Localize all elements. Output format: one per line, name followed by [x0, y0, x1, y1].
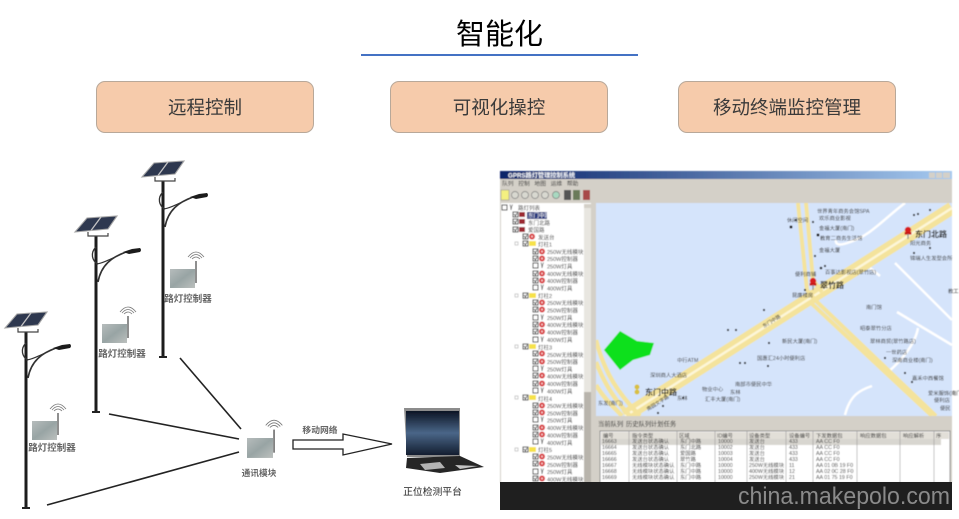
data table: 发送台	[749, 449, 765, 457]
controller icon 3	[170, 252, 204, 288]
tabs: 当前队列	[598, 419, 623, 428]
data table: 16663	[602, 439, 617, 445]
data table: AA CC F0	[816, 445, 840, 451]
map place labels: 百事达影视店(翠竹店)	[825, 268, 876, 276]
button: mobile monitoring management: 移动终端监控管理	[713, 97, 861, 118]
street lamp 2	[75, 216, 141, 413]
map place labels: 欢乐商业影视	[819, 214, 851, 222]
button: visual operation	[390, 81, 608, 133]
controller icon 2	[102, 307, 136, 343]
toolbar	[501, 190, 590, 200]
data table: 10000	[718, 439, 733, 445]
title	[361, 12, 638, 56]
map place labels: 昆廉楼房	[792, 291, 813, 299]
map place labels: 昭泰翠竹分店	[860, 324, 892, 332]
data table: 编号	[603, 432, 614, 440]
menu bar: 队列 控制 地图 运维 帮助	[502, 180, 579, 188]
device tree: 250W灯具	[547, 262, 573, 270]
map place labels: 深南商业楼(南门)	[892, 356, 933, 364]
data table: 10000	[718, 469, 733, 475]
map place labels: 新民大厦(南门)	[782, 337, 818, 345]
map place labels: 国惠汇24小时便利店	[757, 354, 805, 362]
map place labels	[598, 207, 959, 413]
device tree: 250W无线模块	[547, 402, 584, 410]
device tree: 250W控制器	[547, 306, 578, 314]
title bar	[500, 171, 952, 180]
device tree: 400W灯具	[547, 439, 573, 447]
arrow: to monitoring platform	[293, 434, 392, 455]
watermark band	[500, 482, 952, 510]
data table: 下发数据包	[816, 432, 843, 440]
device tree: 250W控制器	[547, 255, 578, 263]
map place labels: 东门中路	[761, 313, 782, 330]
data table: 250W无线模块	[749, 461, 785, 469]
button: visual operation: 可视化操控	[453, 97, 545, 118]
map place labels: 东林	[677, 394, 688, 402]
device tree: 东门中路	[528, 212, 551, 220]
data table: 16665	[602, 451, 617, 457]
map place labels: 便民	[940, 404, 951, 412]
data table: 16664	[602, 445, 617, 451]
data table: 序	[936, 432, 942, 440]
map	[596, 203, 952, 416]
data table: 无线模块状态确认	[632, 461, 675, 469]
device tree: 400W灯具	[547, 388, 573, 396]
communication module label: 通讯模块	[242, 467, 277, 478]
data table: AA CC F0	[816, 439, 840, 445]
communication module icon	[247, 420, 282, 458]
device tree: 路灯列表	[518, 204, 541, 212]
data table: 250W无线模块	[749, 473, 785, 481]
data table: 爱国路	[680, 449, 697, 457]
device tree: 400W无线模块	[547, 424, 584, 432]
tree scrollbar	[584, 204, 591, 483]
data table: 16668	[602, 469, 617, 475]
data table: 12	[789, 469, 795, 475]
data table: 10000	[718, 463, 733, 469]
data table: 区域	[679, 432, 690, 440]
map pins and road names: 东门中路	[645, 387, 677, 397]
data table: AA 01 75 19 F0	[816, 475, 853, 481]
data table: 响应数据包	[860, 432, 887, 440]
data table: 433	[789, 451, 798, 457]
data table: 发送台状态确认	[632, 455, 670, 463]
data table: AA 02 0C 28 F0	[816, 469, 853, 475]
icon: laptop	[404, 408, 484, 473]
controller label 2: 路灯控制器	[98, 348, 146, 360]
map place labels: 世界青年商务会馆SPA	[817, 207, 870, 215]
device tree: 250W无线模块	[547, 351, 584, 359]
device tree: 灯柱5	[538, 446, 552, 454]
controller label 1: 路灯控制器	[28, 442, 76, 454]
map place labels: 南门馆	[866, 303, 882, 311]
device tree: 400W控制器	[547, 432, 578, 440]
data table: 10004	[718, 457, 733, 463]
street lamp 3	[142, 161, 208, 358]
window frame	[500, 171, 952, 483]
data table: 东门中路	[680, 437, 702, 445]
map place labels: 阳光商务	[910, 239, 932, 247]
map pins and road names: 翠竹路	[820, 280, 844, 290]
device tree: 400W无线模块	[547, 476, 584, 484]
data table: 发送台状态确认	[632, 443, 670, 451]
device tree: 250W无线模块	[547, 248, 584, 256]
map pins and road names: 东门北路	[915, 229, 947, 239]
map place labels: 金福大厦	[819, 246, 841, 254]
data table: 无线模块状态确认	[632, 467, 675, 475]
device tree: 250W灯具	[547, 366, 573, 374]
data table	[600, 431, 950, 483]
device tree: 400W灯具	[547, 284, 573, 292]
tabs: 计划任务	[651, 419, 677, 428]
device tree: 250W无线模块	[547, 299, 584, 307]
map place labels: 嘉禾中西餐馆	[912, 374, 944, 382]
diagram: street lamp network	[5, 161, 484, 509]
device tree: 250W灯具	[547, 416, 573, 424]
data table: 指令类型	[632, 432, 654, 440]
device tree: 400W控制器	[547, 328, 578, 336]
device tree: 400W无线模块	[547, 270, 584, 278]
data table: 10002	[718, 445, 733, 451]
map place labels: 金福大厦(南门)	[819, 224, 855, 232]
data table: 400W无线模块	[749, 467, 785, 475]
device tree: 400W控制器	[547, 380, 578, 388]
data table: 东门中路	[680, 473, 702, 481]
map place labels: 翠林商贸(翠竹路店)	[870, 337, 916, 345]
controller icon 1	[32, 404, 66, 440]
map place labels: 东林	[730, 388, 741, 396]
data table: 433	[789, 457, 798, 463]
button: remote control	[96, 81, 314, 133]
device tree: 400W灯具	[547, 336, 573, 344]
data table: 东门北路	[680, 443, 702, 451]
map place labels: 南园文字路	[645, 394, 670, 413]
data table: 无线模块状态确认	[632, 473, 675, 481]
map place labels: 深圳商人大酒店	[650, 371, 687, 379]
device tree: 250W控制器	[547, 358, 578, 366]
device tree: 250W无线模块	[547, 454, 584, 462]
data table: AA 01 0B 19 F0	[816, 463, 853, 469]
map place labels: 便利店	[934, 396, 950, 404]
data table: 11	[789, 463, 795, 469]
data table: 发送台状态确认	[632, 437, 670, 445]
data table: AA CC F0	[816, 457, 840, 463]
controller label 3: 路灯控制器	[164, 293, 212, 305]
data table: 21	[789, 475, 795, 481]
platform label: 正位检测平台	[403, 485, 462, 498]
map place labels: 中行ATM	[677, 356, 698, 364]
data table: 发送台	[749, 437, 765, 445]
device tree: 400W无线模块	[547, 372, 584, 380]
map place labels: 锦瑞人生发型会所	[910, 254, 953, 262]
data table: 10000	[718, 475, 733, 481]
map place labels: 便利商铺	[795, 270, 816, 278]
map place labels: 教工	[948, 287, 959, 295]
device tree: 400W无线模块	[547, 321, 584, 329]
title bar: GPRS路灯管理控制系统	[508, 172, 576, 180]
device tree: 发送台	[538, 234, 555, 242]
device tree: 灯柱4	[538, 395, 552, 403]
panel: GPRS street lamp management software screenshot	[500, 171, 959, 510]
map place labels: 东发(南门)	[598, 399, 623, 407]
data table: 16669	[602, 475, 617, 481]
title: 智能化	[456, 19, 543, 51]
data table: 设备类型	[749, 432, 771, 440]
street lamp 1	[5, 312, 71, 509]
data table: 东门中路	[680, 467, 702, 475]
data table: 东门中路	[680, 461, 702, 469]
data table: 发送台	[749, 455, 765, 463]
data table: 16666	[602, 457, 617, 463]
connection lines	[47, 358, 241, 505]
button: mobile monitoring management	[678, 81, 896, 133]
device tree: 灯柱1	[538, 240, 552, 248]
green zone	[604, 331, 654, 370]
device tree: 250W控制器	[547, 461, 578, 469]
device tree: 东门北路	[528, 219, 551, 227]
mobile network label: 移动网络	[302, 424, 338, 435]
data table: 发送台状态确认	[632, 449, 670, 457]
tabs	[596, 416, 952, 432]
data table: 16667	[602, 463, 617, 469]
data table: AA CC F0	[816, 451, 840, 457]
device tree: 250W控制器	[547, 410, 578, 418]
tree panel	[501, 203, 591, 483]
data table: 响应解析	[903, 432, 925, 440]
map place labels: 一世药店	[886, 348, 907, 356]
device tree: 250W灯具	[547, 468, 573, 476]
map place labels: 教育二商务生活馆	[820, 234, 862, 242]
tabs: 历史队列	[626, 419, 651, 428]
map pins and road names	[634, 227, 947, 397]
device tree	[502, 204, 584, 484]
data table: 设备编号	[789, 432, 810, 440]
data table: 翠竹路	[680, 455, 697, 463]
device tree: 400W控制器	[547, 277, 578, 285]
data table: ID编号	[717, 432, 733, 440]
data table: 433	[789, 439, 798, 445]
data table: 发送台	[749, 443, 765, 451]
map place labels: 南部市便民中华	[735, 380, 773, 388]
device tree: 250W灯具	[547, 314, 573, 322]
map place labels: 休闲空间	[787, 216, 808, 224]
device tree: 爱国路	[528, 226, 545, 234]
device tree: 灯柱3	[538, 344, 552, 352]
data table: 10003	[718, 451, 733, 457]
data table: 433	[789, 445, 798, 451]
device tree: 灯柱2	[538, 292, 552, 300]
button: remote control: 远程控制	[168, 97, 242, 118]
map place labels: 汇丰大厦(南门)	[705, 395, 741, 403]
watermark band: china.makepolo.com	[738, 483, 950, 510]
map place labels: 物业中心	[702, 385, 724, 393]
map point markers	[657, 209, 931, 414]
